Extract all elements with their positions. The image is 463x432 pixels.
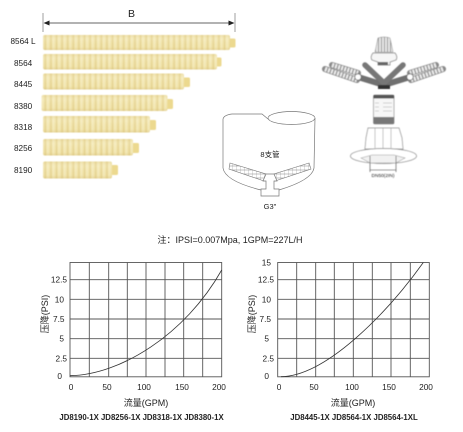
y tick labels: 10 (262, 294, 271, 304)
tank diagram (223, 112, 315, 211)
note: 注：IPSI=0.007Mpa, 1GPM=227L/H (157, 234, 303, 245)
y tick labels: 7.5 (259, 314, 271, 324)
y tick labels: 0 (57, 371, 62, 381)
model caption: JD8445-1X JD8564-1X JD8564-1XL (290, 413, 418, 422)
model labels: 8380 (14, 102, 33, 111)
tube: 8318 (43, 116, 156, 132)
brush arms (325, 65, 443, 89)
x tick labels: 100 (137, 382, 151, 392)
model labels: 8445 (14, 80, 33, 89)
exploded assembly (325, 37, 443, 179)
tube: 8445 (43, 74, 190, 90)
grid (70, 262, 222, 377)
left chart (39, 262, 226, 422)
strainer top (371, 37, 397, 65)
y tick labels: 0 (264, 371, 269, 381)
x axis title: 流量(GPM) (124, 397, 168, 408)
base flange (350, 128, 416, 172)
grid (278, 262, 429, 377)
y tick labels (51, 274, 67, 381)
y axis title: 压降(PSI) (246, 295, 257, 333)
tube: 8256 (43, 139, 139, 156)
model labels: 8564 L (10, 37, 36, 46)
tube: 8564 (43, 54, 222, 70)
x tick labels: 150 (382, 382, 396, 392)
y tick labels: 15 (262, 258, 271, 268)
dimension arrow: B (43, 8, 235, 32)
model labels: 8564 (14, 59, 33, 68)
y tick labels: 5 (264, 334, 269, 344)
x tick labels: 100 (345, 382, 359, 392)
model labels (10, 37, 36, 175)
x axis title: 流量(GPM) (331, 397, 375, 408)
tank label: 8支管 (260, 149, 280, 159)
x tick labels: 200 (212, 382, 226, 392)
tube: 8564 L (43, 35, 236, 50)
right chart (246, 258, 433, 422)
x tick labels: 0 (69, 382, 74, 392)
curve (281, 262, 423, 377)
x tick labels: 50 (102, 382, 112, 392)
tank outlet (261, 174, 279, 196)
x tick labels: 50 (309, 382, 319, 392)
size label: DN50(2IN) (372, 173, 395, 179)
y tick labels: 12.5 (51, 274, 67, 284)
tube: 8190 (43, 162, 118, 178)
y tick labels: 5 (59, 334, 64, 344)
model labels: 8256 (14, 144, 33, 153)
x tick labels: 200 (419, 382, 433, 392)
y axis title: 压降(PSI) (39, 295, 50, 333)
outlet label: G3" (264, 202, 277, 211)
y tick labels: 12.5 (258, 274, 274, 284)
x tick labels (277, 382, 433, 392)
y tick labels (258, 258, 274, 381)
x tick labels: 0 (277, 382, 282, 392)
x tick labels (69, 382, 226, 392)
model labels: 8318 (14, 123, 33, 132)
dimension arrow: B: B (128, 8, 135, 20)
x tick labels: 150 (175, 382, 189, 392)
ribbed filter tubes (42, 35, 236, 178)
model caption: JD8190-1X JD8256-1X JD8318-1X JD8380-1X (59, 413, 224, 422)
y tick labels: 10 (55, 294, 64, 304)
y tick labels: 2.5 (262, 354, 274, 364)
y tick labels: 2.5 (55, 354, 67, 364)
y tick labels: 7.5 (53, 314, 65, 324)
tank arms (229, 163, 311, 181)
cylinder (374, 95, 394, 124)
tube: 8380 (42, 95, 173, 111)
model labels: 8190 (14, 166, 33, 175)
curve (70, 270, 222, 376)
